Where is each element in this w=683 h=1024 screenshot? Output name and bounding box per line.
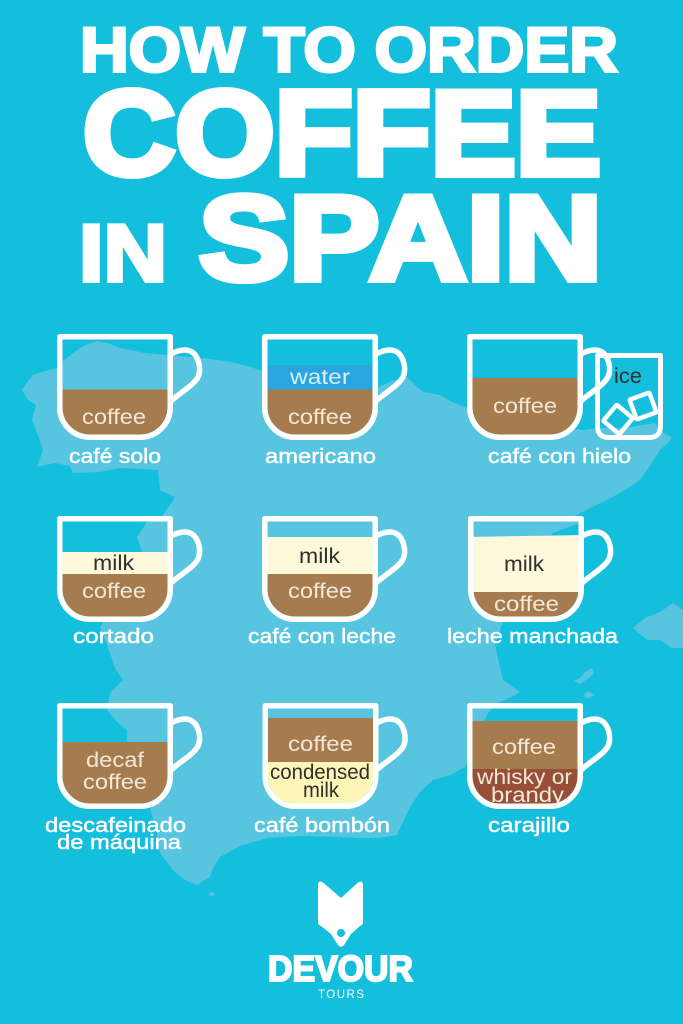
cup: café bombón <box>254 706 405 837</box>
title line: coffee: COFFEE <box>83 66 601 200</box>
icon: glass of ice <box>598 356 660 438</box>
icon: fox head <box>318 881 363 947</box>
cup: descafeinado de máquina: coffee <box>83 771 147 794</box>
cup: americano: coffee <box>288 406 352 429</box>
title line: spain: SPAIN <box>199 172 602 306</box>
cup: carajillo: carajillo <box>488 815 570 837</box>
title line: in: IN <box>79 209 167 299</box>
cup: café solo <box>57 337 200 468</box>
cup: café bombón: café bombón <box>254 815 390 837</box>
cup: café bombón: condensed <box>270 761 370 784</box>
cup: café con hielo: café con hielo <box>488 446 631 468</box>
map of Spain <box>22 341 683 896</box>
cup: cortado: coffee <box>82 580 146 603</box>
cup: cortado: cortado <box>73 626 154 648</box>
cup: carajillo <box>467 706 610 837</box>
cup: leche manchada: leche manchada <box>447 626 619 648</box>
cup: leche manchada: milk <box>504 553 545 576</box>
logo: devour tours <box>268 881 413 1001</box>
logo wordmark: DEVOUR <box>268 948 413 989</box>
cup: americano: water <box>289 366 350 389</box>
cup: descafeinado de máquina: descafeinado <box>45 815 186 837</box>
logo subtitle: TOURS <box>318 989 364 1001</box>
cup: café con leche: coffee <box>288 580 352 603</box>
cup: leche manchada: coffee <box>494 593 559 616</box>
cup: carajillo: whisky or <box>476 766 572 789</box>
cup: leche manchada <box>447 519 619 648</box>
cup: café con leche: milk <box>299 545 341 568</box>
cup: café con hielo <box>467 337 660 468</box>
cup: café con leche: café con leche <box>248 626 396 648</box>
cup: americano: americano <box>265 446 376 468</box>
icon: fox nose <box>337 929 345 937</box>
cup: descafeinado de máquina <box>45 706 200 854</box>
cup: descafeinado de máquina: de máquina <box>57 832 182 854</box>
cup: cortado <box>57 519 200 648</box>
cup: café con hielo: ice <box>614 365 642 388</box>
cup: café con leche <box>248 519 405 648</box>
cup: café solo: café solo <box>69 446 161 468</box>
cup: carajillo: coffee <box>492 736 556 759</box>
cup: cortado: milk <box>93 552 135 575</box>
title line: how to order: HOW TO ORDER <box>80 16 618 86</box>
cup: café con hielo: coffee <box>493 395 557 418</box>
cup: carajillo: brandy <box>491 784 565 807</box>
cup: descafeinado de máquina: decaf <box>86 749 144 772</box>
cup: americano <box>262 337 405 468</box>
cup: café bombón: coffee <box>288 733 353 756</box>
cup: café solo: coffee <box>82 406 146 429</box>
cup: café bombón: milk <box>303 779 339 802</box>
title <box>79 16 618 306</box>
